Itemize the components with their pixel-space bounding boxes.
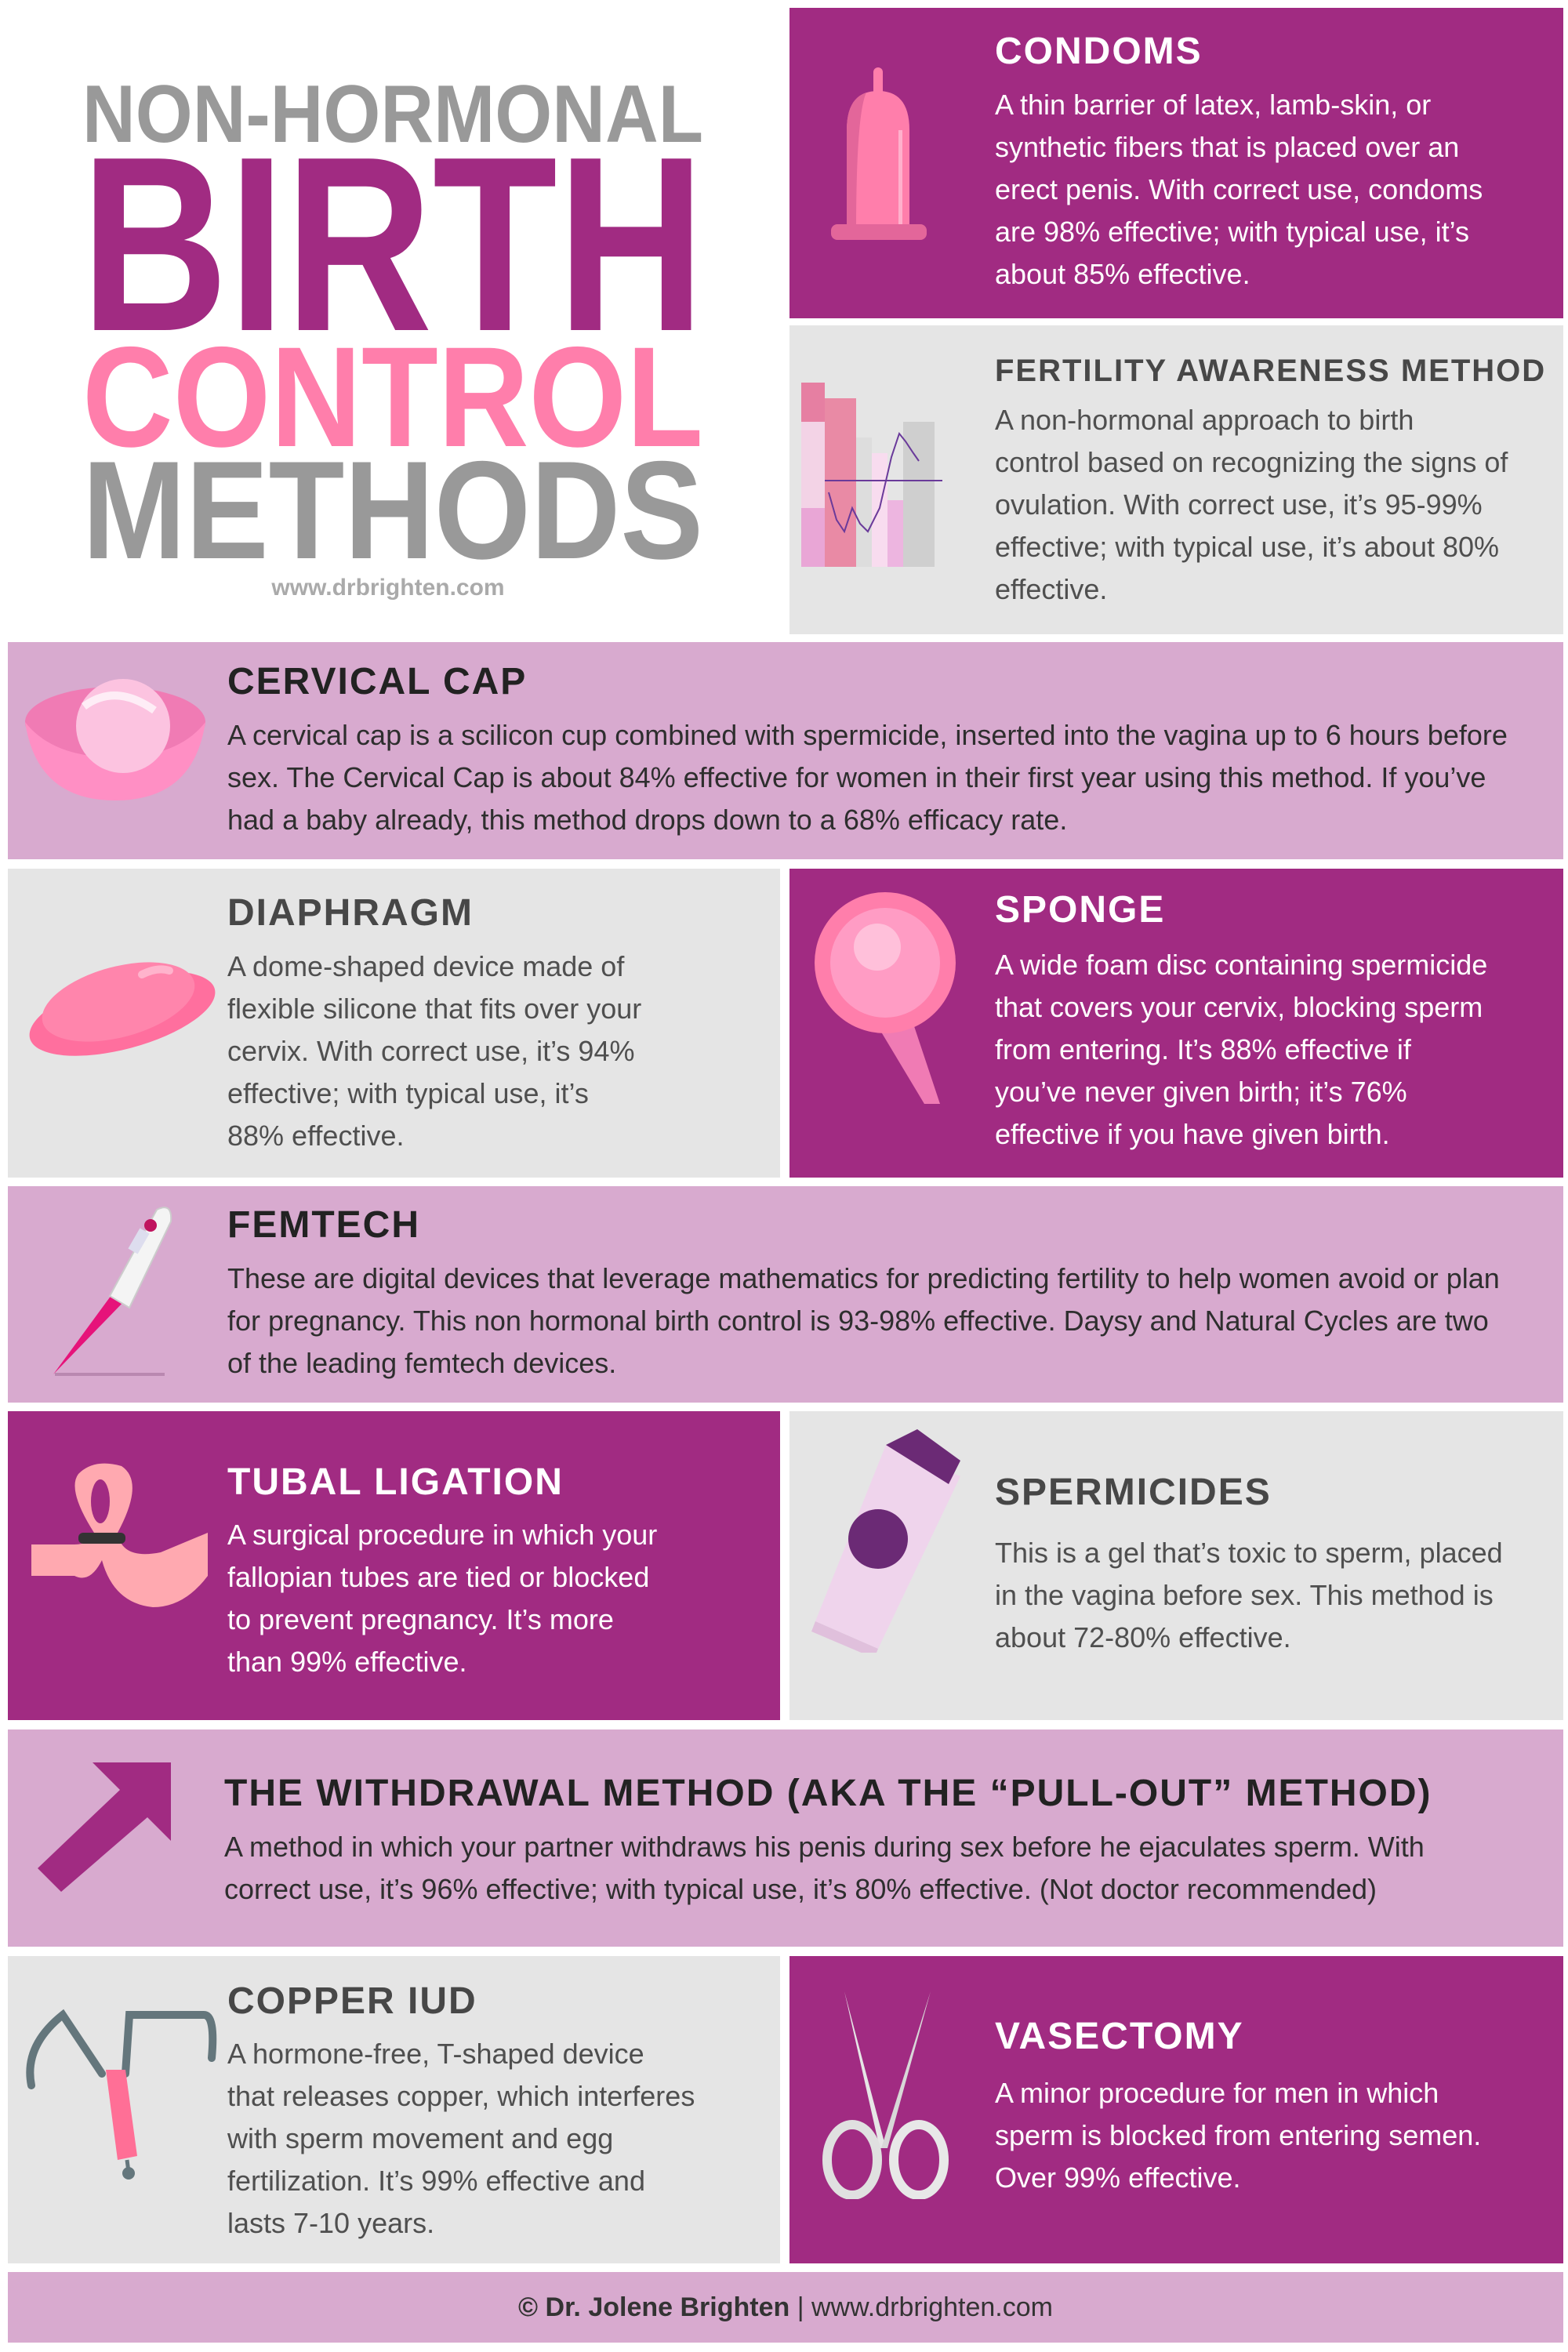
text: correct use, it’s 96% effective; with typical use, it’s 80% effective. (Not doctor recommended)	[224, 1873, 1377, 1905]
text: from entering. It’s 88% effective if	[995, 1033, 1411, 1065]
icon: condom	[831, 67, 927, 240]
panel: sponge	[789, 869, 1563, 1178]
text: A non-hormonal approach to birth	[995, 404, 1414, 436]
text: A thin barrier of latex, lamb-skin, or	[995, 89, 1431, 121]
heading: SPONGE	[995, 889, 1165, 931]
heading: CERVICAL CAP	[227, 661, 527, 702]
text	[227, 1519, 657, 1678]
panel: withdrawal	[8, 1730, 1563, 1947]
text: flexible silicone that fits over your	[227, 993, 641, 1025]
panel: tubal ligation	[8, 1411, 780, 1720]
text: of the leading femtech devices.	[227, 1347, 616, 1379]
text	[227, 950, 641, 1152]
text: about 72-80% effective.	[995, 1621, 1291, 1653]
text: effective; with typical use, it’s	[227, 1077, 589, 1109]
panel: condoms	[789, 8, 1563, 318]
panel: vasectomy	[789, 1956, 1563, 2263]
text: had a baby already, this method drops down to a 68% efficacy rate.	[227, 804, 1067, 836]
icon: cervical cap	[25, 679, 205, 800]
text: in the vagina before sex. This method is	[995, 1579, 1494, 1611]
text: effective.	[995, 573, 1107, 605]
text	[995, 949, 1487, 1150]
text: that releases copper, which interferes	[227, 2080, 695, 2112]
text: about 85% effective.	[995, 258, 1250, 290]
text: A wide foam disc containing spermicide	[995, 949, 1487, 981]
text: that covers your cervix, blocking sperm	[995, 991, 1483, 1023]
heading: THE WITHDRAWAL METHOD (AKA THE “PULL-OUT” METHOD)	[224, 1773, 1432, 1814]
icon: chart	[801, 383, 942, 567]
icon: thermometer	[53, 1207, 172, 1376]
panel: femtech	[8, 1186, 1563, 1403]
text: lasts 7-10 years.	[227, 2207, 434, 2239]
heading: TUBAL LIGATION	[227, 1461, 564, 1503]
text: This is a gel that’s toxic to sperm, placed	[995, 1537, 1503, 1569]
text: to prevent pregnancy. It’s more	[227, 1603, 614, 1635]
heading: FERTILITY AWARENESS METHOD	[995, 354, 1546, 388]
icon: scissors	[822, 1991, 949, 2199]
icon: tube	[811, 1429, 960, 1653]
text: A dome-shaped device made of	[227, 950, 624, 982]
text: 88% effective.	[227, 1120, 404, 1152]
panel: diaphragm	[8, 869, 780, 1178]
heading: VASECTOMY	[995, 2016, 1244, 2057]
heading: DIAPHRAGM	[227, 892, 474, 934]
text: with sperm movement and egg	[227, 2122, 613, 2154]
heading: SPERMICIDES	[995, 1472, 1272, 1513]
text: A hormone-free, T-shaped device	[227, 2038, 644, 2070]
text: Over 99% effective.	[995, 2161, 1240, 2194]
text: effective if you have given birth.	[995, 1118, 1390, 1150]
text: you’ve never given birth; it’s 76%	[995, 1076, 1407, 1108]
text: ovulation. With correct use, it’s 95-99%	[995, 488, 1483, 521]
icon: iud	[26, 2009, 216, 2180]
title: www.drbrighten.com	[270, 575, 505, 601]
panel: cervical cap	[8, 642, 1563, 859]
text: are 98% effective; with typical use, it’s	[995, 216, 1469, 248]
text	[224, 1831, 1425, 1905]
icon: tubes	[31, 1463, 208, 1607]
text: sex. The Cervical Cap is about 84% effective for women in their first year using this method. If you’ve	[227, 761, 1486, 793]
text	[227, 2038, 695, 2239]
footer: © Dr. Jolene Brighten | www.drbrighten.com	[518, 2292, 1053, 2322]
text: A method in which your partner withdraws his penis during sex before he ejaculates sperm. With	[224, 1831, 1425, 1863]
text: A minor procedure for men in which	[995, 2077, 1439, 2109]
text	[227, 719, 1508, 836]
text: synthetic fibers that is placed over an	[995, 131, 1459, 163]
text: than 99% effective.	[227, 1646, 467, 1678]
panel: spermicides	[789, 1411, 1563, 1720]
panel: fertility awareness	[789, 325, 1563, 634]
heading: FEMTECH	[227, 1204, 420, 1246]
text	[995, 89, 1483, 290]
text	[995, 1537, 1503, 1653]
heading: COPPER IUD	[227, 1980, 477, 2022]
footer	[8, 2272, 1563, 2343]
text	[995, 2077, 1481, 2194]
text: A cervical cap is a scilicon cup combined with spermicide, inserted into the vagina up to 6 hours before	[227, 719, 1508, 751]
text: for pregnancy. This non hormonal birth control is 93-98% effective. Daysy and Natural Cycles are two	[227, 1305, 1489, 1337]
heading: CONDOMS	[995, 31, 1203, 72]
icon: sponge	[815, 892, 956, 1104]
icon: diaphragm	[30, 962, 215, 1056]
text: fertilization. It’s 99% effective and	[227, 2165, 645, 2197]
text: fallopian tubes are tied or blocked	[227, 1561, 649, 1593]
title	[81, 74, 705, 601]
icon: arrow	[38, 1762, 171, 1892]
text: control based on recognizing the signs of	[995, 446, 1508, 478]
text	[995, 404, 1508, 605]
text: These are digital devices that leverage mathematics for predicting fertility to help women avoid or plan	[227, 1262, 1500, 1294]
text: sperm is blocked from entering semen.	[995, 2119, 1481, 2151]
text	[227, 1262, 1500, 1379]
text: erect penis. With correct use, condoms	[995, 173, 1483, 205]
panel: copper iud	[8, 1956, 780, 2263]
text: A surgical procedure in which your	[227, 1519, 657, 1551]
text: cervix. With correct use, it’s 94%	[227, 1035, 635, 1067]
text: effective; with typical use, it’s about 80%	[995, 531, 1499, 563]
